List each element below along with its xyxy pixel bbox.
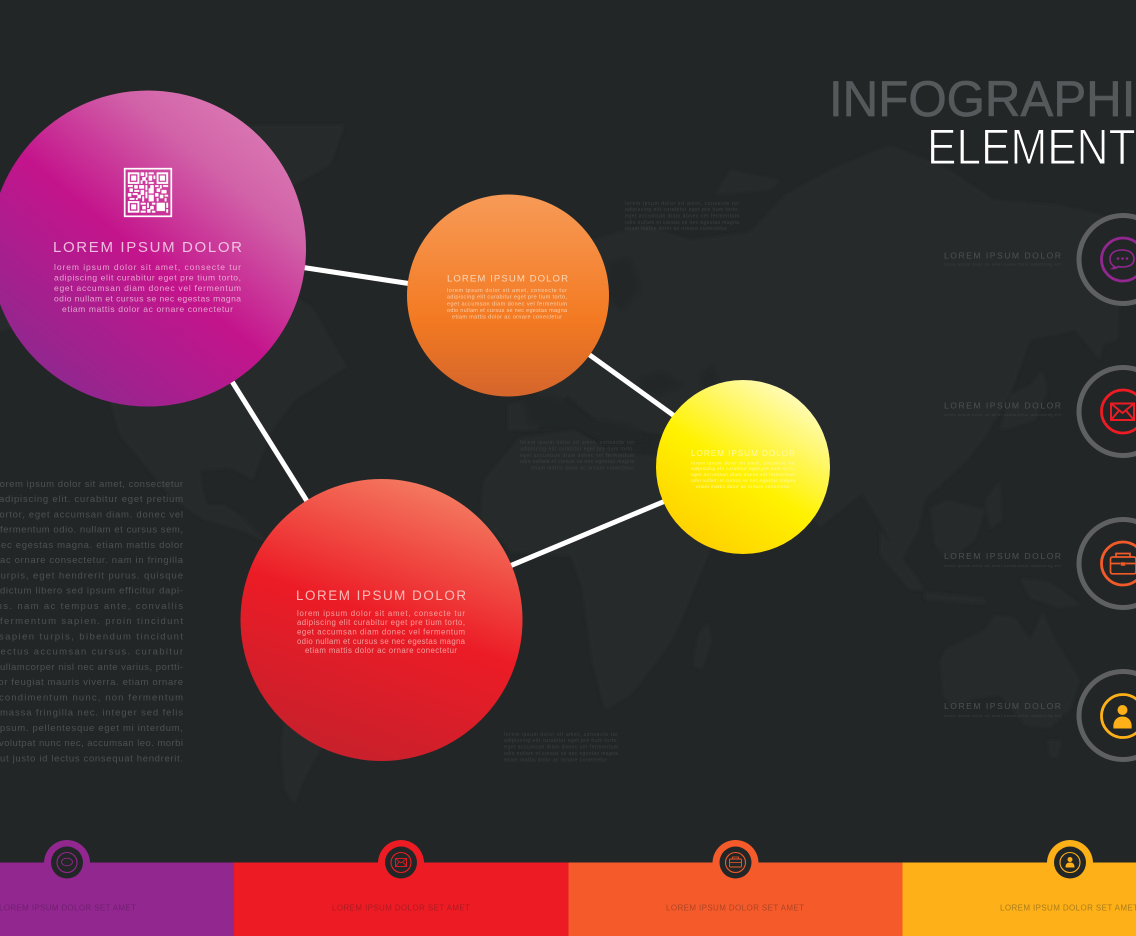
faint text block: bottom: [504, 732, 618, 763]
purple disc: [0, 90, 306, 406]
red body text: etiam mattis dolor ac ornare conectetur: [305, 646, 457, 655]
panel: purple circle: [0, 90, 306, 406]
red body text: eget accumsan diam donec vel fermentum: [297, 628, 465, 636]
bottom panel: orange: [568, 840, 902, 936]
purple tab: [44, 840, 90, 886]
faint text block: middle: odio nullam et cursus se nec egestas magna: [520, 459, 634, 465]
left text column: adipiscing elit. curabitur eget pretium: [0, 494, 183, 505]
yellow body text: [691, 460, 795, 490]
red bar: [234, 862, 568, 936]
orange body text: [447, 288, 568, 321]
purple label: LOREM IPSUM DOLOR SET AMET: [0, 904, 136, 912]
purple body text: [54, 262, 241, 314]
panel: orange circle: [407, 194, 609, 396]
chat sublabel: lorem ipsum dolor sit amet consectetur adipiscing elit: [944, 262, 1062, 266]
orange body text: odio nullam et cursus se nec egestas magna: [447, 308, 568, 314]
icon: briefcase: [1102, 542, 1136, 585]
left text column: tor feugiat mauris viverra. etiam ornare: [0, 677, 183, 688]
orange bar: [568, 862, 902, 936]
mail label: LOREM IPSUM DOLOR: [944, 400, 1061, 410]
faint text block: top: adipiscing elit curabitur eget pre tium torto,: [625, 207, 739, 213]
briefcase sublabel: lorem ipsum dolor sit amet consectetur adipiscing elit: [944, 563, 1062, 568]
tab icon: briefcase: [720, 846, 752, 878]
icon: envelope: [1102, 390, 1136, 433]
person sublabel: lorem ipsum dolor sit amet consectetur adipiscing elit: [944, 713, 1062, 718]
red label: LOREM IPSUM DOLOR SET AMET: [332, 904, 470, 912]
person label: LOREM IPSUM DOLOR: [944, 701, 1061, 711]
faint text block: bottom: odio nullam et cursus se nec egestas magna: [504, 751, 618, 757]
faint text block: middle: adipiscing elit curabitur eget pre tium torto,: [520, 446, 634, 452]
list item: person: [944, 672, 1136, 760]
faint text block: middle: [520, 440, 634, 472]
orange tab: [712, 840, 758, 886]
orange heading: LOREM IPSUM DOLOR: [447, 274, 568, 284]
red tab: [378, 840, 424, 886]
purple body text: etiam mattis dolor ac ornare conectetur: [62, 304, 233, 314]
purple body text: adipiscing elit curabitur eget pre tium torto,: [54, 272, 241, 282]
faint text block: bottom: lorem ipsum dolor sit amet, consecte tur: [504, 732, 618, 738]
icon: QR code: [125, 169, 171, 216]
red body text: adipiscing elit curabitur eget pre tium torto,: [297, 618, 465, 627]
purple bar: [0, 862, 234, 936]
orange body text: etiam mattis dolor ac ornare conectetur: [452, 315, 562, 321]
left text column: tortor, eget accumsan diam. donec vel: [0, 509, 183, 520]
left text column: ut justo id lectus consequat hendrerit.: [0, 753, 183, 764]
left text column: massa fringilla nec. integer sed felis: [0, 708, 183, 718]
icon: person: [1102, 694, 1136, 738]
yellow body text: etiam mattis dolor ac ornare conectetur: [696, 484, 790, 490]
briefcase label: LOREM IPSUM DOLOR: [944, 551, 1061, 561]
yellow body text: odio nullam et cursus se nec egestas magna: [691, 478, 795, 484]
left text column: turpis, eget hendrerit purus. quisque: [0, 570, 183, 581]
red body text: odio nullam et cursus se nec egestas magna: [297, 637, 466, 646]
briefcase ring: [1079, 520, 1136, 608]
faint text block: bottom: eget accumsan diam donec vel fermentum: [504, 745, 618, 751]
mail sublabel: lorem ipsum dolor sit amet consectetur adipiscing elit: [944, 412, 1062, 417]
chat label: LOREM IPSUM DOLOR: [944, 250, 1061, 260]
map seas: [520, 258, 770, 525]
icon: chat bubble: [1102, 238, 1136, 281]
left text column: dictum libero sed ipsum efficitur dapi-: [0, 586, 183, 596]
chat ring: [1079, 216, 1136, 304]
faint text block: top: [625, 201, 739, 232]
yellow tab: [1047, 840, 1093, 886]
panel: red circle: [240, 479, 522, 761]
purple body text: lorem ipsum dolor sit amet, consecte tur: [54, 262, 241, 272]
faint text block: top: lorem ipsum dolor sit amet, consecte tur: [625, 201, 739, 207]
left text column: ipsum. pellentesque eget mi interdum,: [0, 723, 183, 734]
yellow heading: LOREM IPSUM DOLOR: [691, 449, 795, 458]
world map: [0, 125, 1136, 805]
orange body text: eget accumsan diam donec vel fermentum: [447, 301, 567, 307]
title: [829, 71, 1136, 175]
yellow label: LOREM IPSUM DOLOR SET AMET: [1000, 904, 1136, 912]
orange body text: adipiscing elit curabitur eget pre tium torto,: [447, 295, 567, 301]
red heading: LOREM IPSUM DOLOR: [296, 588, 466, 603]
bottom panel: red: [234, 840, 568, 936]
yellow body text: lorem ipsum dolor sit amet, consecte tur: [691, 460, 795, 466]
purple body text: eget accumsan diam donec vel fermentum: [54, 283, 241, 293]
yellow body text: adipiscing elit curabitur eget pre tium torto,: [691, 466, 795, 472]
left text column: ullamcorper nisl nec ante varius, portti-: [0, 662, 183, 673]
faint text block: middle: lorem ipsum dolor sit amet, consecte tur: [520, 440, 634, 446]
faint text block: bottom: adipiscing elit curabitur eget pre tium torto,: [504, 738, 618, 744]
left text column: sapien turpis, bibendum tincidunt: [0, 631, 183, 642]
faint text block: middle: eget accumsan diam donec vel fermentum: [520, 453, 634, 459]
faint text block: top: etiam mattis dolor ac ornare conectetur: [625, 226, 727, 232]
bottom panel: purple: [0, 840, 234, 936]
mail ring: [1079, 368, 1136, 456]
faint text block: top: eget accumsan diam donec vel fermentum: [625, 214, 739, 220]
tab icon: chat: [51, 846, 83, 878]
purple heading: LOREM IPSUM DOLOR: [53, 239, 242, 256]
faint text block: top: odio nullam et cursus se nec egestas magna: [625, 220, 739, 226]
list item: briefcase: [944, 520, 1136, 608]
left text column: fermentum odio. nullam et cursus sem,: [0, 524, 183, 536]
yellow bar: [902, 862, 1136, 936]
bottom panel: yellow: [902, 840, 1136, 936]
left text column: [0, 479, 184, 764]
orange disc: [407, 194, 609, 396]
left text column: lectus accumsan cursus. curabitur: [0, 646, 183, 658]
yellow body text: eget accumsan diam donec vel fermentum: [691, 472, 795, 478]
red disc: [240, 479, 522, 761]
list item: mail: [944, 368, 1136, 456]
orange label: LOREM IPSUM DOLOR SET AMET: [666, 904, 804, 912]
list item: chat: [944, 216, 1136, 304]
faint text block: bottom: etiam mattis dolor ac ornare conectetur: [504, 757, 607, 763]
orange body text: lorem ipsum dolor sit amet, consecte tur: [447, 288, 567, 294]
left text column: condimentum nunc, non fermentum: [0, 692, 183, 703]
yellow disc: [656, 380, 830, 554]
connector lines: [228, 267, 680, 568]
panel: yellow circle: [656, 380, 830, 554]
left text column: lorem ipsum dolor sit amet, consectetur: [0, 479, 183, 490]
left text column: fermentum sapien. proin tincidunt: [0, 616, 183, 627]
left text column: volutpat nunc nec, accumsan leo. morbi: [0, 738, 183, 749]
red body text: lorem ipsum dolor sit amet, consecte tur: [297, 609, 465, 618]
left text column: nec egestas magna. etiam mattis dolor: [0, 540, 183, 551]
person ring: [1079, 672, 1136, 760]
red body text: [297, 609, 466, 655]
purple body text: odio nullam et cursus se nec egestas magna: [54, 294, 241, 304]
left text column: ac ornare consectetur. nam in fringilla: [0, 555, 184, 566]
tab icon: envelope: [385, 846, 417, 878]
tab icon: person: [1054, 846, 1086, 878]
faint text block: middle: etiam mattis dolor ac ornare conectetur: [531, 466, 634, 472]
